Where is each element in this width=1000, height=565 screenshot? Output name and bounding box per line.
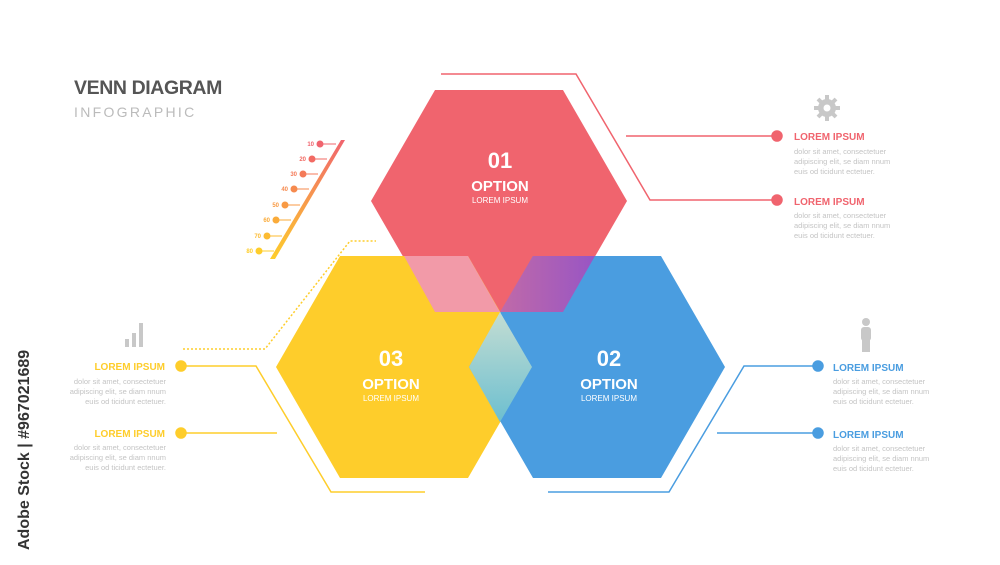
text: blue item 2 — [833, 430, 929, 473]
text: yellow item 2: adipiscing elit, se diam nnum — [70, 453, 166, 462]
title — [74, 77, 222, 120]
scale chart: 50 — [272, 203, 280, 209]
title: VENN DIAGRAM — [74, 77, 222, 99]
text: blue item 1: euis od ticidunt ectetuer. — [833, 397, 914, 406]
label 03: 03 — [379, 346, 403, 371]
scale chart: 30 — [290, 172, 298, 178]
scale chart: 40 — [281, 187, 289, 193]
text: red item 1: euis od ticidunt ectetuer. — [794, 167, 875, 176]
label 03: LOREM IPSUM — [363, 394, 419, 403]
text: blue item 2: dolor sit amet, consectetuer — [833, 444, 926, 453]
overlap red-yellow — [404, 256, 500, 312]
text: red item 2: LOREM IPSUM — [794, 197, 865, 208]
connector lines yellow — [176, 241, 425, 492]
connector lines red — [441, 74, 782, 205]
text: blue item 1: dolor sit amet, consectetuer — [833, 377, 926, 386]
text: blue item 1 — [833, 363, 929, 406]
label 01: 01 — [488, 148, 512, 173]
watermark text: Adobe Stock | #967021689 — [16, 350, 33, 550]
label 03 — [362, 346, 420, 403]
text: yellow item 2: euis od ticidunt ectetuer. — [85, 463, 166, 472]
scale chart: 60 — [263, 218, 271, 224]
label 01: OPTION — [471, 178, 529, 195]
text: red item 1: adipiscing elit, se diam nnum — [794, 157, 890, 166]
label 01 — [471, 148, 529, 205]
text: red item 1: LOREM IPSUM — [794, 132, 865, 143]
text: red item 2 — [794, 197, 890, 240]
icon: gear — [814, 95, 840, 121]
label 03: OPTION — [362, 376, 420, 393]
scale chart — [246, 140, 345, 259]
label 01: LOREM IPSUM — [472, 196, 528, 205]
connector lines blue — [548, 361, 823, 492]
scale chart: 20 — [299, 157, 307, 163]
scale chart: 70 — [254, 234, 262, 240]
title: INFOGRAPHIC — [74, 104, 197, 120]
text: red item 2: euis od ticidunt ectetuer. — [794, 231, 875, 240]
scale chart: 80 — [246, 249, 254, 255]
text: yellow item 1: adipiscing elit, se diam nnum — [70, 387, 166, 396]
hexagon: yellow option 03 — [276, 256, 532, 478]
label 02: 02 — [597, 346, 621, 371]
text: red item 1: dolor sit amet, consectetuer — [794, 147, 887, 156]
text: blue item 2: euis od ticidunt ectetuer. — [833, 464, 914, 473]
hexagon: red option 01 — [371, 90, 627, 312]
label 02: LOREM IPSUM — [581, 394, 637, 403]
text: blue item 2: LOREM IPSUM — [833, 430, 904, 441]
text: yellow item 1 — [70, 362, 166, 406]
text: yellow item 1: dolor sit amet, consectetuer — [74, 377, 166, 386]
text: yellow item 1: euis od ticidunt ectetuer. — [85, 397, 166, 406]
scale chart: 10 — [307, 142, 315, 148]
text: red item 2: adipiscing elit, se diam nnum — [794, 221, 890, 230]
text: red item 1 — [794, 132, 890, 176]
hexagon: blue option 02 — [469, 256, 725, 478]
overlap red-blue — [500, 256, 595, 312]
text: blue item 1: adipiscing elit, se diam nnum — [833, 387, 929, 396]
text: blue item 2: adipiscing elit, se diam nnum — [833, 454, 929, 463]
label 02: OPTION — [580, 376, 638, 393]
icon: bar chart — [125, 323, 143, 347]
text: yellow item 1: LOREM IPSUM — [94, 362, 165, 373]
overlap yellow-blue — [469, 312, 532, 422]
text: yellow item 2: dolor sit amet, consectetuer — [74, 443, 166, 452]
text: yellow item 2 — [70, 429, 166, 472]
text: blue item 1: LOREM IPSUM — [833, 363, 904, 374]
label 02 — [580, 346, 638, 403]
text: yellow item 2: LOREM IPSUM — [94, 429, 165, 440]
icon: person — [861, 318, 871, 352]
text: red item 2: dolor sit amet, consectetuer — [794, 211, 887, 220]
